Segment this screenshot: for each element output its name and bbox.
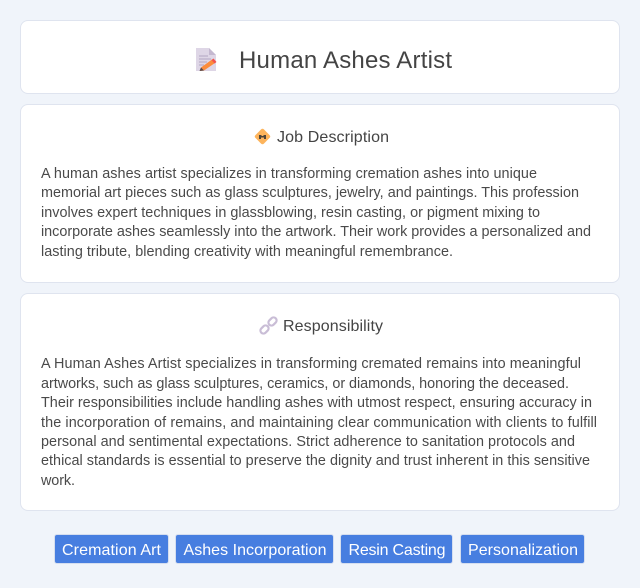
tag: ashes incorporation: Ashes Incorporation <box>184 542 326 559</box>
heading: responsibility: Responsibility <box>283 318 383 335</box>
text block: job description: memorial art pieces such as glass sculptures, jewelry, and paintings. This profession <box>41 185 579 201</box>
text block: responsibility: A Human Ashes Artist specializes in transforming cremated remains into meaningful <box>41 356 581 372</box>
text block: responsibility: the incorporation of remains, and maintaining clear communication with clients to fulfill <box>41 415 597 431</box>
icon: document with pencil <box>196 48 216 71</box>
text block: responsibility: Their responsibilities include handling ashes with utmost respect, ensuring accuracy in <box>41 395 592 411</box>
text block: job description: incorporate ashes seamlessly into the artwork. Their work provides a personalized and <box>41 224 591 240</box>
title: Human Ashes Artist <box>239 47 452 74</box>
text block: responsibility: work. <box>40 473 75 489</box>
text block: responsibility: artworks, such as glass sculptures, ceramics, or diamonds, honoring the deceased. <box>41 376 569 392</box>
text block: responsibility: ethical standards is essential to preserve the dignity and trust inherent in this sensitive <box>41 453 590 469</box>
heading: job description: Job Description <box>277 129 389 146</box>
tag: personalization: Personalization <box>468 542 578 559</box>
text block: job description: involves expert techniques in glassblowing, resin casting, or pigment mixing to <box>41 205 540 221</box>
tag: resin casting <box>340 534 453 564</box>
icon: chain link <box>259 316 278 335</box>
tag: cremation art: Cremation Art <box>62 542 162 559</box>
tag: resin casting: Resin Casting <box>348 542 446 559</box>
text block: job description: A human ashes artist specializes in transforming cremation ashes into unique <box>41 166 537 182</box>
text block: job description <box>41 166 591 260</box>
panel: responsibility <box>20 293 620 511</box>
header panel <box>20 20 620 94</box>
text block: job description: lasting tribute, blending creativity with meaningful remembrance. <box>41 244 453 260</box>
text block: responsibility: personal and sentimental expectations. Strict adherence to sanitation protocols and <box>41 434 575 450</box>
tag: cremation art <box>54 534 169 564</box>
tag: personalization <box>460 534 585 564</box>
tag: ashes incorporation <box>175 534 334 564</box>
panel: job description <box>20 104 620 283</box>
icon: orange diamond <box>254 128 270 144</box>
